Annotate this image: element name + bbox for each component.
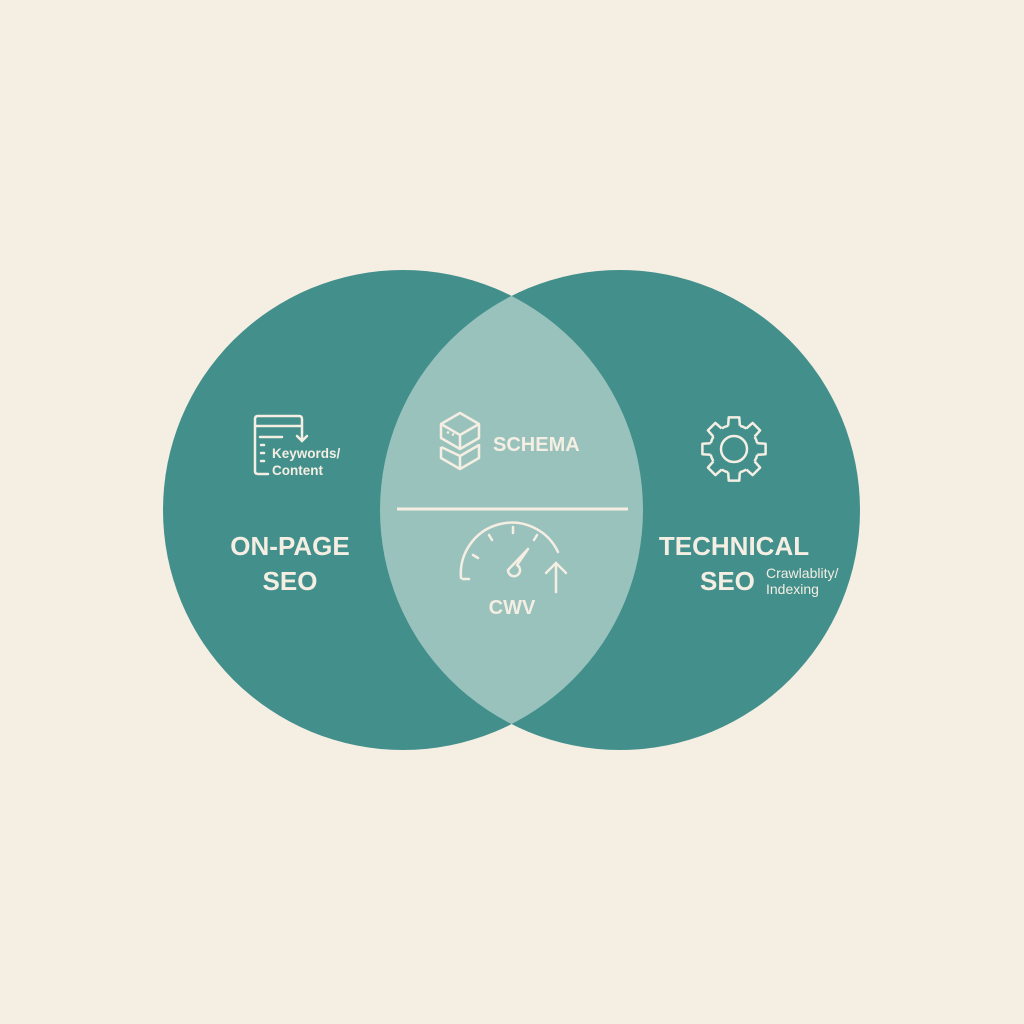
text: keywords/content — [272, 446, 341, 478]
circle: technical SEO — [380, 270, 860, 750]
circle: on-page SEO — [163, 270, 643, 750]
heading: technical SEO — [659, 531, 809, 596]
text: schema: SCHEMA — [493, 434, 580, 456]
heading: on-page SEO: SEO — [263, 566, 317, 596]
divider line in overlap — [397, 508, 628, 510]
text: crawlability/indexing: Indexing — [766, 581, 819, 597]
icon: keywords document — [255, 416, 307, 474]
text: CWV: CWV — [489, 597, 536, 619]
text: crawlability/indexing: Crawlablity/ — [766, 565, 838, 581]
text: keywords/content: Content — [272, 463, 323, 478]
overlap lens — [380, 296, 643, 724]
heading: on-page SEO: ON-PAGE — [230, 531, 350, 561]
heading: technical SEO: SEO — [700, 566, 755, 596]
text: crawlability/indexing — [766, 565, 838, 597]
heading: on-page SEO — [230, 531, 350, 596]
icon: speed gauge — [461, 523, 566, 592]
icon: gear — [702, 417, 766, 481]
text: keywords/content: Keywords/ — [272, 446, 341, 461]
heading: technical SEO: TECHNICAL — [659, 531, 809, 561]
icon: schema cubes — [441, 413, 479, 469]
